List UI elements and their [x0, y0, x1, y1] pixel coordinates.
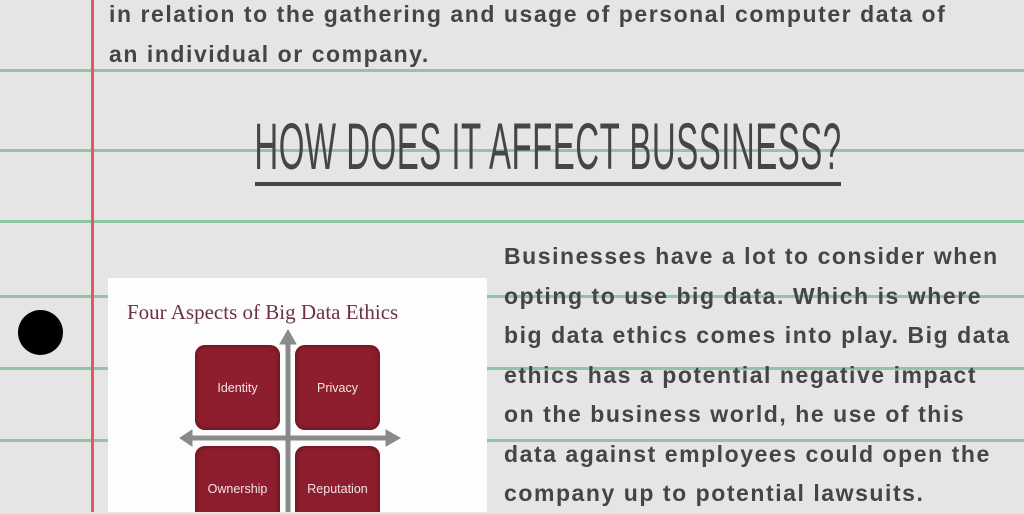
box: Ownership — [195, 446, 280, 514]
body text — [504, 243, 1011, 506]
box: Identity: Identity — [217, 380, 258, 394]
box: Reputation: Reputation — [307, 482, 368, 496]
intro text — [109, 1, 946, 67]
box: Reputation — [295, 446, 380, 514]
body text: opting to use big data. Which is where — [504, 282, 982, 308]
title: HOW DOES IT AFFECT BUSSINESS? — [254, 109, 842, 183]
body text: company up to potential lawsuits. — [504, 480, 924, 506]
image: four aspects of big data ethics — [108, 278, 487, 512]
box: Ownership: Ownership — [208, 482, 267, 496]
body text: data against employees could open the — [504, 440, 991, 466]
icon: black hole-punch dot — [18, 310, 63, 355]
arrows — [179, 329, 401, 512]
intro text: an individual or company. — [109, 40, 430, 66]
body text: big data ethics comes into play. Big data — [504, 322, 1011, 348]
box: Privacy — [295, 345, 380, 430]
box: Privacy: Privacy — [317, 380, 358, 394]
body text: ethics has a potential negative impact — [504, 362, 977, 388]
image title: Four Aspects of Big Data Ethics — [127, 300, 398, 324]
box: Identity — [195, 345, 280, 430]
body text: on the business world, he use of this — [504, 401, 965, 427]
body text: Businesses have a lot to consider when — [504, 243, 999, 269]
intro text: in relation to the gathering and usage of personal computer data of — [109, 1, 946, 27]
